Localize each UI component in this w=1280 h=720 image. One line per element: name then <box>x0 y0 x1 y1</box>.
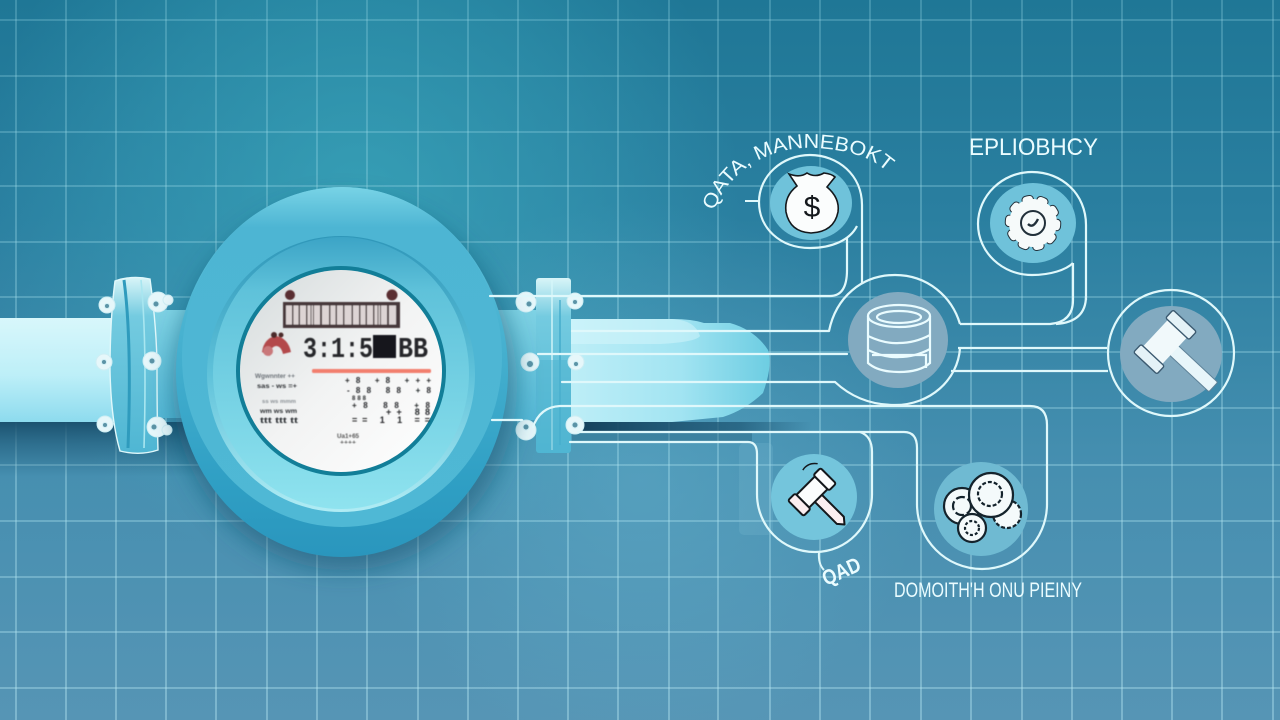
small readings left: Wgwnnter ++ <box>255 374 296 380</box>
connector to database <box>960 263 1086 324</box>
icon: gavel <box>1134 310 1233 408</box>
small readings right: == 1 1 == <box>352 415 430 425</box>
flow lines <box>490 238 1047 504</box>
circle: database <box>829 275 960 405</box>
label: bottom caption: DOMOITH'H ONU PIEINY <box>894 579 1082 602</box>
red divider <box>312 369 431 373</box>
icon: gears cluster <box>944 473 1021 542</box>
bolts: right flange <box>516 292 584 440</box>
disc <box>990 183 1076 263</box>
small readings right: +8 +8 +++ <box>345 376 431 385</box>
outer housing <box>176 187 508 557</box>
circle: gavel small <box>757 454 872 570</box>
reading digits: 3:1:5 <box>303 333 373 366</box>
disc <box>771 454 857 540</box>
label: efficiency: EPLIOBHCY <box>969 134 1098 161</box>
small readings left: sas - ws =+ <box>257 384 298 390</box>
mid ring outline <box>207 236 475 512</box>
small readings left: wm ws wm <box>259 409 297 415</box>
meter body <box>176 187 508 557</box>
reading icon <box>262 332 291 356</box>
small readings right: 888 <box>352 396 367 402</box>
small readings right: -88 88 +8 <box>347 386 432 395</box>
connector: right collar <box>495 310 543 420</box>
small readings left: ttt ttt tt <box>260 416 298 425</box>
tick <box>745 200 759 202</box>
circle: legal gavel <box>1108 290 1234 416</box>
circle: coins <box>917 462 1047 569</box>
dial face <box>240 270 442 472</box>
disc <box>848 292 948 388</box>
arc outline <box>917 504 1047 569</box>
icon: gavel small <box>780 459 861 541</box>
label: data management: QATA, MANNEBOKT <box>704 134 896 208</box>
disc <box>934 462 1028 556</box>
pipe shadow right <box>572 422 812 431</box>
icon: database <box>868 305 930 372</box>
display knobs <box>285 290 398 300</box>
meter shadow <box>173 200 517 570</box>
arc outline <box>757 494 872 552</box>
left flange <box>96 277 173 453</box>
arc outline <box>978 172 1086 300</box>
icon: gear <box>1009 199 1057 247</box>
barcode display <box>283 302 400 328</box>
outline <box>1108 290 1234 416</box>
panel: faint backing card <box>739 443 773 535</box>
small readings left: ss ws mmm <box>262 399 297 405</box>
label: gavel small: QAD <box>819 553 865 591</box>
right flange <box>516 278 584 453</box>
bolts: left flange <box>96 292 173 437</box>
disc <box>1120 306 1222 402</box>
circle: data management <box>745 155 862 284</box>
pipe shadow left <box>0 422 240 477</box>
connector: left collar <box>143 310 193 418</box>
dial details <box>255 290 432 446</box>
arc outline <box>829 275 960 405</box>
arc outline <box>759 155 862 284</box>
reading digits <box>303 333 428 366</box>
reading digits: BB <box>398 333 428 366</box>
tail <box>819 552 824 570</box>
small readings right: +8 88 +8 <box>352 401 431 410</box>
outer ring <box>182 187 502 527</box>
inner bevel <box>213 237 469 509</box>
small readings right: ++++ <box>340 440 356 446</box>
small readings right <box>337 376 432 446</box>
disc <box>770 166 852 240</box>
small readings right: Ua1+65 <box>337 434 360 440</box>
pipe: glowing outflow right <box>571 319 770 422</box>
dial recess <box>236 266 446 476</box>
circle: efficiency <box>960 172 1086 324</box>
small readings right: ++ 88 <box>386 407 430 417</box>
icon: money bag: $ <box>804 191 821 224</box>
small readings left <box>255 374 298 425</box>
connectors: database to gavel <box>951 348 1108 371</box>
pipe: left section <box>0 318 125 422</box>
